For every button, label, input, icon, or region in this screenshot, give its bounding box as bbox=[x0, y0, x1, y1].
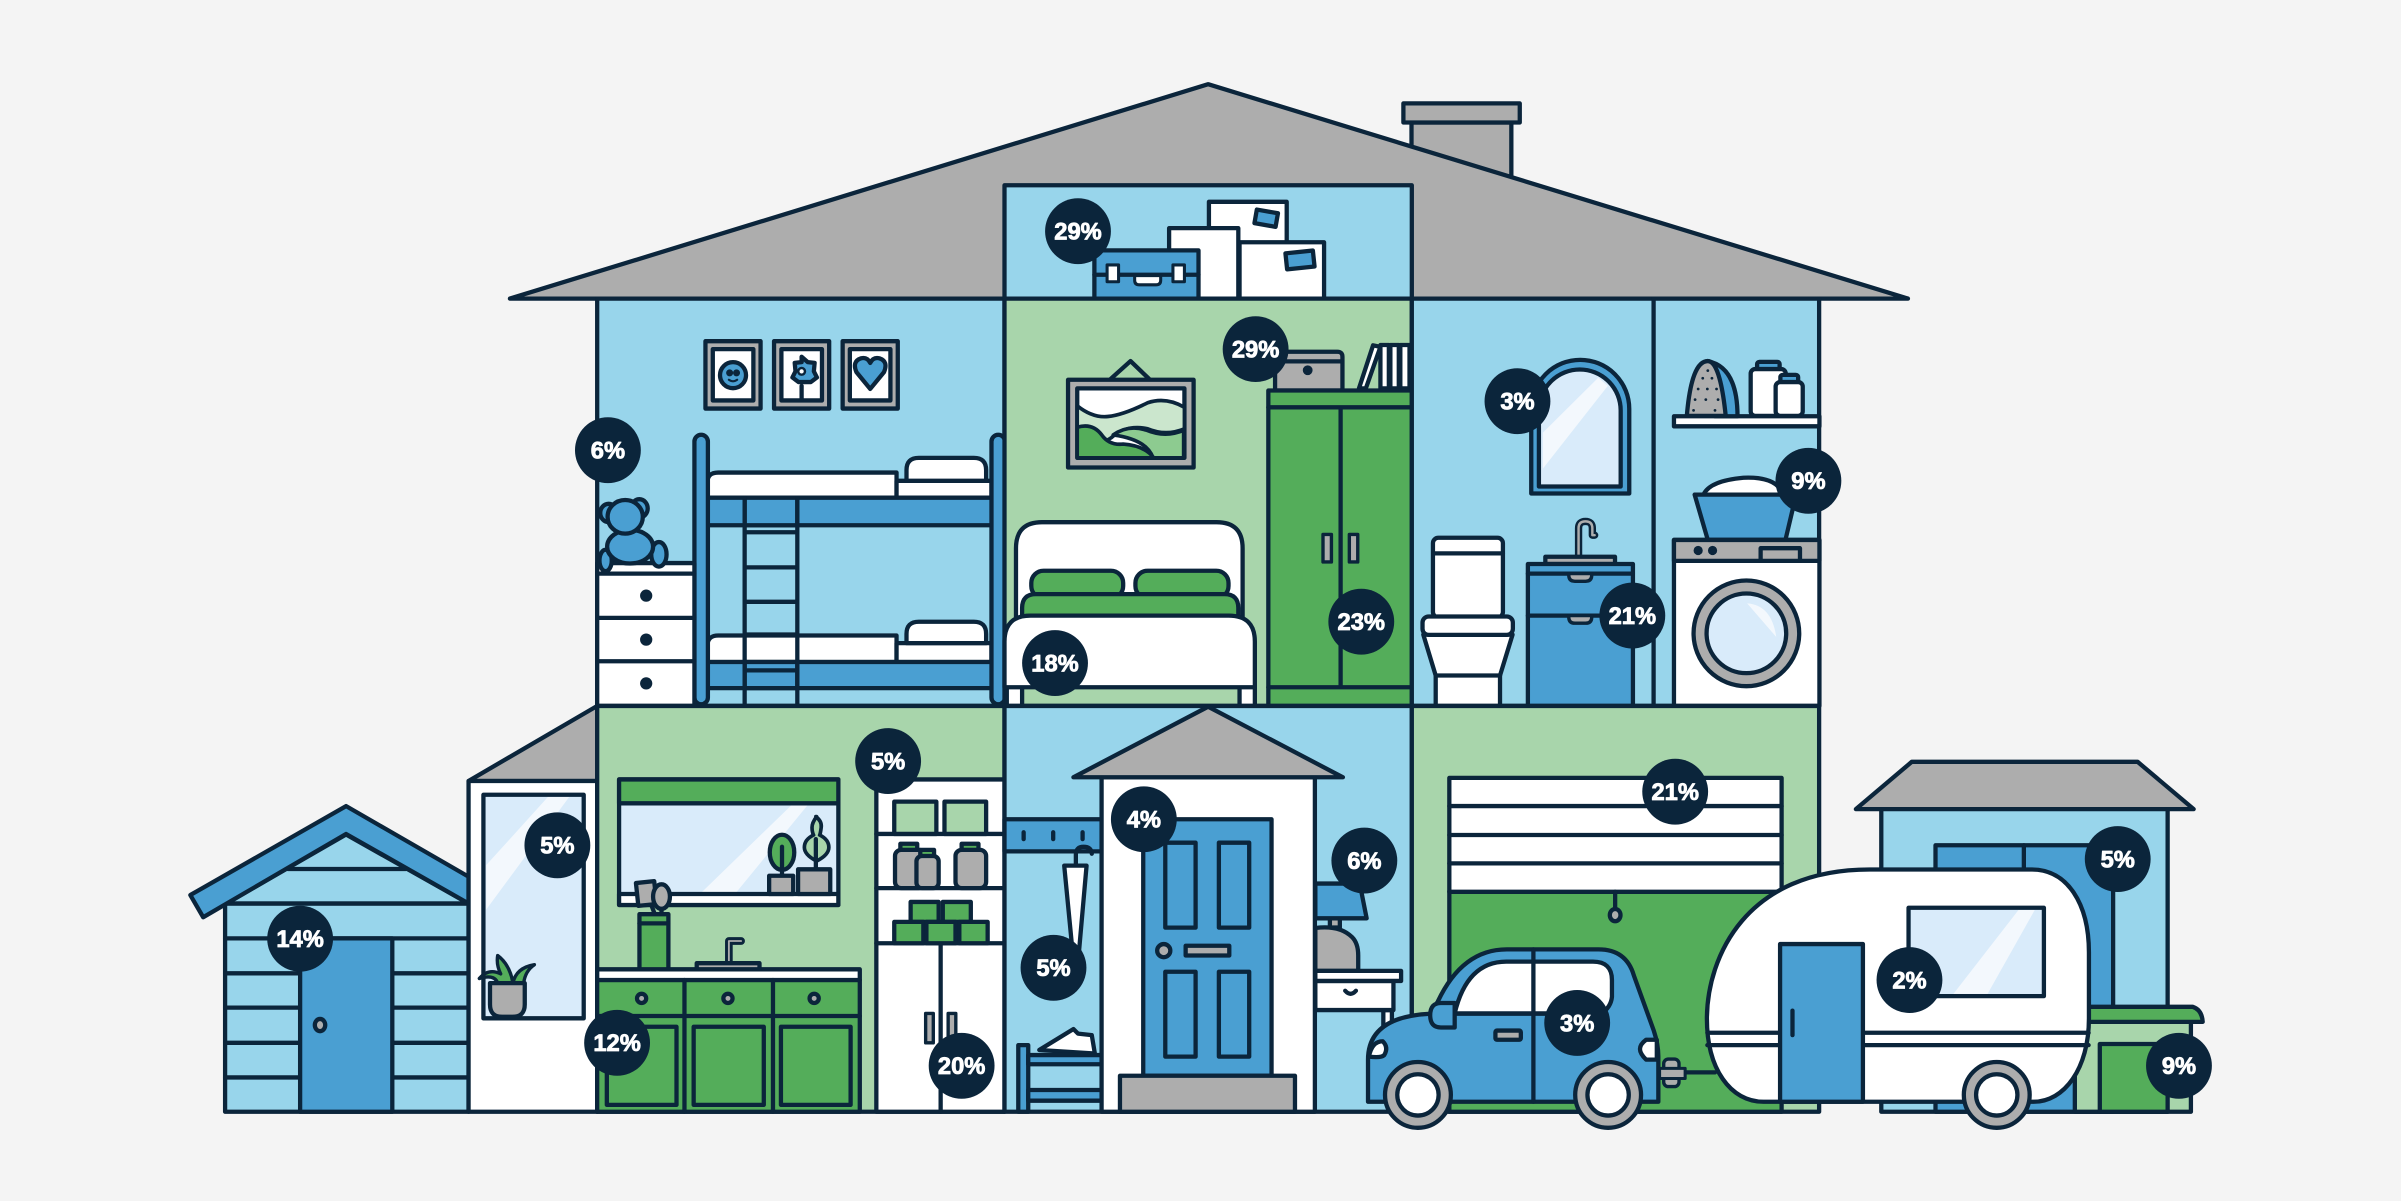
badge: right shed 5% bbox=[2085, 826, 2151, 892]
badge: front door 4% bbox=[1111, 786, 1177, 852]
bed bbox=[1004, 522, 1255, 706]
badge: extension window 5% bbox=[524, 812, 590, 878]
panel: main roof bbox=[510, 84, 1908, 299]
icon: tow hitch bbox=[1660, 1059, 1715, 1087]
laundry basket bbox=[1695, 478, 1796, 540]
vanity unit bbox=[1528, 521, 1633, 706]
badge: mirror 3%: 3% bbox=[1500, 390, 1535, 416]
door pull bbox=[1610, 892, 1621, 921]
badge: kitchen cabinets 12% bbox=[584, 1010, 650, 1076]
front door bbox=[1143, 819, 1272, 1076]
badge: shelf 29% bbox=[1223, 316, 1289, 382]
panel: kitchen bbox=[597, 706, 1004, 1112]
wardrobe bbox=[1268, 390, 1412, 706]
badge: bin 9%: 9% bbox=[2162, 1054, 2196, 1080]
badge: caravan 2%: 2% bbox=[1892, 968, 1927, 994]
badge: lamp 6% bbox=[1331, 828, 1397, 894]
icon: chimney bbox=[1403, 103, 1520, 184]
badge: garage door 21%: 21% bbox=[1651, 780, 1699, 806]
framed landscape painting bbox=[1068, 361, 1194, 468]
badge: teddy 6% bbox=[575, 417, 641, 483]
porch bbox=[1073, 707, 1343, 1112]
icon: car bbox=[1368, 949, 2030, 1128]
panel: side extension bbox=[469, 706, 597, 1112]
mirror bbox=[1531, 360, 1629, 494]
badge: garage door 21% bbox=[1642, 759, 1708, 825]
percentage badges bbox=[267, 198, 2212, 1099]
badge: bin 9% bbox=[2146, 1033, 2212, 1099]
potted plant bbox=[479, 956, 534, 1017]
umbrella bbox=[1064, 847, 1092, 952]
badge: laundry basket 9%: 9% bbox=[1791, 469, 1826, 495]
panel: children's bedroom bbox=[597, 299, 1005, 706]
icon: caravan bbox=[1707, 869, 2089, 1102]
laptop and books bbox=[1275, 345, 1410, 390]
kitchen window bbox=[619, 779, 838, 905]
badge: vanity 21% bbox=[1599, 583, 1665, 649]
panel: garage bbox=[1412, 706, 1819, 1112]
badge: shelf 29%: 29% bbox=[1232, 338, 1279, 364]
kitchen counter and cabinets bbox=[597, 969, 860, 1112]
badge: left shed 14% bbox=[267, 906, 333, 972]
panel: entrance hall bbox=[1004, 706, 1412, 1112]
utensil vase bbox=[636, 881, 670, 970]
panel: bin bbox=[2075, 1007, 2203, 1112]
badge: bed 18% bbox=[1022, 630, 1088, 696]
badge: mirror 3% bbox=[1485, 368, 1550, 434]
badge: wardrobe 23%: 23% bbox=[1338, 610, 1385, 636]
badge: lamp 6%: 6% bbox=[1347, 849, 1381, 875]
panel: left garden shed bbox=[190, 806, 469, 1112]
badge: attic 29% bbox=[1045, 198, 1111, 264]
badge: caravan 2% bbox=[1877, 947, 1942, 1013]
shoe rack bbox=[1018, 1029, 1102, 1112]
badge: bed 18%: 18% bbox=[1031, 651, 1079, 677]
panel: attic bbox=[1004, 185, 1412, 299]
icon: teddy bear bbox=[599, 499, 667, 571]
pantry bbox=[876, 779, 1004, 1112]
badge: umbrella 5% bbox=[1021, 935, 1086, 1001]
panel: laundry bbox=[1654, 299, 1819, 706]
badge: laundry basket 9% bbox=[1775, 448, 1841, 514]
panel: bathroom bbox=[1412, 299, 1654, 706]
badge: left shed 14%: 14% bbox=[276, 927, 324, 953]
framed pictures bbox=[705, 341, 898, 409]
kitchen tap bbox=[697, 941, 760, 969]
badge: teddy 6%: 6% bbox=[591, 439, 625, 465]
badge: pantry shelves 5% bbox=[855, 728, 921, 794]
dresser bbox=[597, 563, 694, 706]
panel: right garden shed bbox=[1856, 762, 2194, 1112]
panel: master bedroom bbox=[1004, 299, 1412, 706]
tall window bbox=[483, 795, 584, 1018]
coat rack bbox=[1004, 819, 1102, 851]
badge: wardrobe 23% bbox=[1328, 589, 1394, 655]
window plants bbox=[769, 817, 830, 894]
bunk bed bbox=[694, 435, 1005, 706]
toilet bbox=[1423, 538, 1513, 706]
badge: pantry cupboard 20% bbox=[929, 1033, 995, 1099]
badge: kitchen cabinets 12%: 12% bbox=[593, 1031, 641, 1057]
badge: car 3% bbox=[1544, 990, 1610, 1056]
side table and lamp bbox=[1315, 884, 1401, 1074]
badge: vanity 21%: 21% bbox=[1609, 604, 1656, 630]
badge: car 3%: 3% bbox=[1560, 1011, 1594, 1037]
badge: pantry cupboard 20%: 20% bbox=[938, 1054, 985, 1080]
shelf with iron and bottles bbox=[1674, 361, 1819, 426]
badge: front door 4%: 4% bbox=[1127, 808, 1161, 834]
badge: attic 29%: 29% bbox=[1054, 220, 1102, 246]
badge: umbrella 5%: 5% bbox=[1036, 956, 1071, 982]
badge: extension window 5%: 5% bbox=[540, 834, 575, 860]
badge: pantry shelves 5%: 5% bbox=[871, 749, 905, 775]
roller door bbox=[1449, 778, 1782, 892]
washing machine bbox=[1674, 540, 1819, 706]
badge: right shed 5%: 5% bbox=[2101, 847, 2135, 873]
